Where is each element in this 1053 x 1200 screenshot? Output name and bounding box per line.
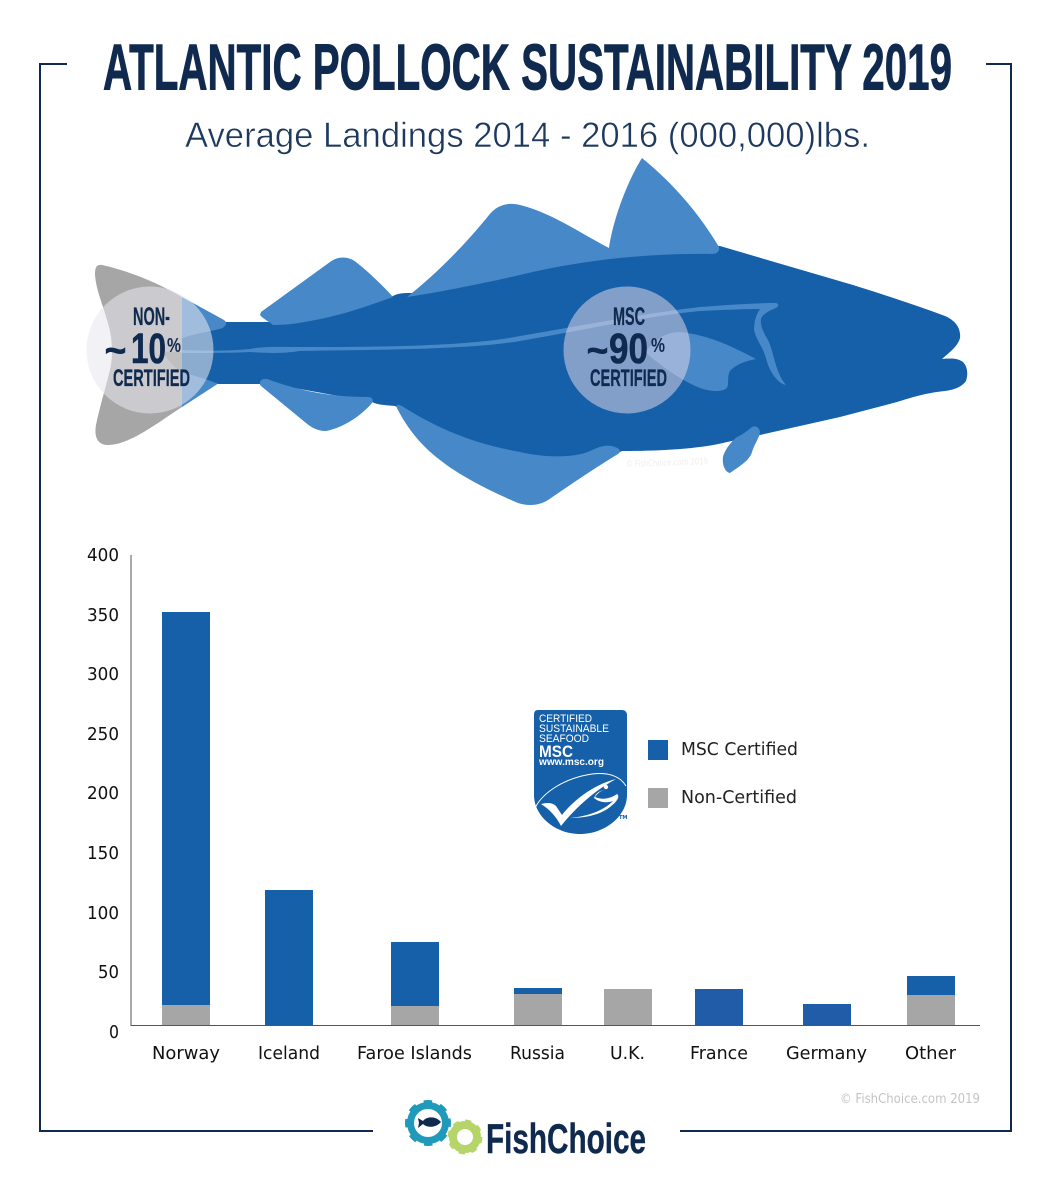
anal fin bbox=[396, 405, 620, 505]
lateral line and gill bbox=[182, 303, 786, 385]
legend: MSC Certified bbox=[681, 739, 798, 760]
rear ventral fin bbox=[260, 379, 373, 431]
bar: France bbox=[695, 989, 743, 1025]
x axis labels: Germany bbox=[786, 1043, 867, 1064]
y axis labels: 250 bbox=[87, 724, 119, 745]
x axis labels: Iceland bbox=[258, 1043, 320, 1064]
trademark: TM bbox=[619, 815, 627, 821]
fish watermark: © FishChoice.com 2019 bbox=[626, 457, 708, 470]
x axis labels: U.K. bbox=[610, 1043, 645, 1064]
legend: Non-Certified bbox=[681, 787, 797, 808]
copyright: © FishChoice.com 2019 bbox=[840, 1092, 980, 1107]
wordmark: FishChoice bbox=[486, 1115, 646, 1162]
label: MSC 90 percent: CERTIFIED bbox=[590, 365, 667, 392]
x axis labels: Faroe Islands bbox=[357, 1043, 472, 1064]
label: MSC 90 percent: ~ bbox=[587, 332, 608, 370]
fish illustration bbox=[86, 158, 967, 505]
x axis labels: France bbox=[690, 1043, 748, 1064]
label: non-certified 10 percent bbox=[105, 303, 190, 392]
label: non-certified 10 percent: ~ bbox=[105, 332, 126, 370]
x axis labels bbox=[152, 1043, 957, 1064]
tail wedge in grey bbox=[163, 352, 182, 372]
y axis labels: 100 bbox=[87, 903, 119, 924]
pelvic fin bbox=[723, 426, 760, 473]
rear dorsal fin bbox=[260, 258, 393, 325]
x axis labels: Norway bbox=[152, 1043, 220, 1064]
tail fin: grey non-certified part bbox=[95, 265, 182, 445]
label: non-certified 10 percent: NON- bbox=[133, 303, 170, 331]
bar: Norway bbox=[162, 612, 210, 1025]
x axis labels: Other bbox=[905, 1043, 957, 1064]
logo fish bbox=[570, 790, 618, 818]
y axis labels: 300 bbox=[87, 664, 119, 685]
y axis labels: 50 bbox=[98, 962, 119, 983]
label: MSC 90 percent: % bbox=[651, 335, 665, 357]
bar: Germany bbox=[803, 1004, 851, 1025]
blue gear bbox=[404, 1099, 452, 1147]
y axis labels: 350 bbox=[87, 605, 119, 626]
y axis labels: 0 bbox=[109, 1022, 119, 1043]
logo text: www.msc.org bbox=[538, 757, 604, 768]
label: non-certified 10 percent: % bbox=[167, 335, 181, 357]
pectoral fin bbox=[645, 332, 756, 391]
bar: Faroe Islands bbox=[391, 942, 439, 1025]
bar: Russia bbox=[514, 988, 562, 1025]
FishChoice logo bbox=[404, 1099, 646, 1162]
main dorsal fins bbox=[407, 158, 719, 297]
logo text: CERTIFIED bbox=[539, 713, 592, 725]
y axis labels: 200 bbox=[87, 783, 119, 804]
label: non-certified 10 percent: CERTIFIED bbox=[113, 365, 190, 392]
green gear bbox=[450, 1122, 480, 1152]
tail fin: blue certified part bbox=[182, 297, 226, 407]
y axis labels bbox=[87, 545, 119, 1043]
logo tick bbox=[541, 779, 616, 826]
label: MSC 90 percent: MSC bbox=[613, 303, 645, 331]
y axis labels: 150 bbox=[87, 843, 119, 864]
bar: Iceland bbox=[265, 890, 313, 1025]
logo text: MSC bbox=[539, 742, 573, 761]
bar: U.K. bbox=[604, 989, 652, 1025]
bar chart bbox=[87, 545, 980, 1064]
fish body bbox=[182, 246, 967, 465]
MSC logo bbox=[534, 710, 627, 834]
logo arc bbox=[535, 774, 626, 808]
x axis labels: Russia bbox=[510, 1043, 565, 1064]
translucent circle: MSC bbox=[564, 286, 690, 414]
logo text: SUSTAINABLE bbox=[539, 723, 609, 735]
label: MSC 90 percent: 90 bbox=[609, 325, 648, 373]
logo text: SEAFOOD bbox=[539, 733, 589, 745]
legend bbox=[648, 739, 798, 808]
bar: Other bbox=[907, 976, 955, 1025]
label: non-certified 10 percent: 10 bbox=[131, 325, 166, 373]
label: MSC 90 percent bbox=[587, 303, 667, 392]
subtitle: Average Landings 2014 - 2016 (000,000)lbs. bbox=[185, 116, 870, 155]
y axis labels: 400 bbox=[87, 545, 119, 566]
translucent circle: non-certified bbox=[86, 286, 214, 414]
axes bbox=[131, 555, 980, 1026]
fish in gear bbox=[418, 1117, 441, 1128]
logo text bbox=[538, 713, 609, 768]
